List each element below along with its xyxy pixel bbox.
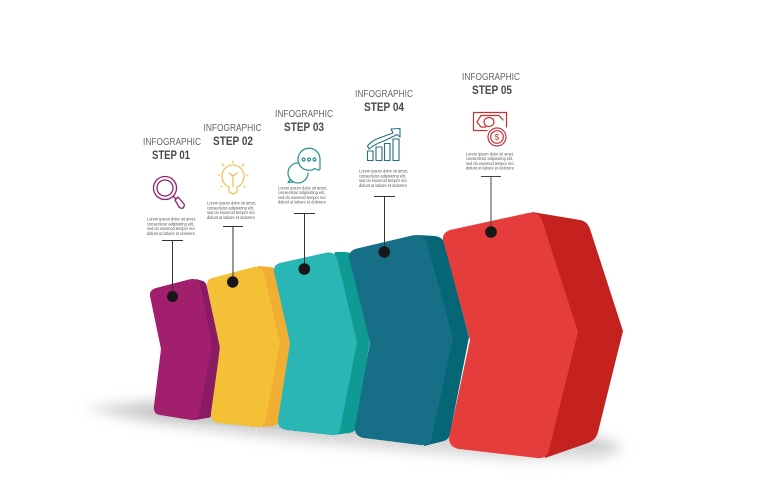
text block: step 1: didunt ut labore et dolorere bbox=[147, 231, 196, 236]
text block: step 1: Lorem ipsum dolor sit amet, bbox=[147, 216, 196, 222]
heading: step 4 bbox=[355, 89, 413, 114]
text block: step 2: sed do eiusmod tempor inci bbox=[207, 210, 255, 215]
text block: step 5: didunt ut labore et dolorere bbox=[466, 166, 515, 171]
connector: step 4 bbox=[374, 196, 395, 258]
text block: step 5: consectetur adipisicing elit, bbox=[466, 156, 513, 161]
text block: step 2: Lorem ipsum dolor sit amet, bbox=[207, 200, 256, 206]
text block: step 1: sed do eiusmod tempor inci bbox=[147, 226, 195, 231]
step 4 block bbox=[349, 235, 469, 446]
heading: step 2 bbox=[204, 123, 262, 148]
heading: step 2: STEP 02 bbox=[213, 136, 253, 148]
text block: step 3: sed do eiusmod tempor inci bbox=[278, 195, 326, 200]
heading: step 3: STEP 03 bbox=[284, 122, 324, 134]
icon: light bulb bbox=[218, 161, 248, 194]
text block: step 2 bbox=[207, 200, 256, 220]
icon: chat bubbles bbox=[288, 148, 320, 183]
text block: step 5: sed do eiusmod tempor inci bbox=[466, 161, 514, 166]
text block: step 1: consectetur adipisicing elit, bbox=[147, 221, 194, 226]
text block: step 2: consectetur adipisicing elit, bbox=[207, 205, 254, 210]
heading: step 3: INFOGRAPHIC bbox=[275, 109, 333, 120]
heading: step 3 bbox=[275, 109, 333, 134]
heading: step 2: INFOGRAPHIC bbox=[204, 123, 262, 134]
step 5 block bbox=[443, 212, 623, 458]
heading: step 4: STEP 04 bbox=[364, 102, 405, 114]
connector: step 1 bbox=[162, 240, 183, 302]
text block: step 4: sed do eiusmod tempor inci bbox=[359, 178, 407, 183]
heading: step 1: STEP 01 bbox=[152, 150, 190, 162]
heading: step 1: INFOGRAPHIC bbox=[143, 137, 201, 148]
text block: step 4: didunt ut labore et dolorere bbox=[359, 183, 408, 188]
text block: step 3: consectetur adipisicing elit, bbox=[278, 190, 325, 195]
text block: step 3: Lorem ipsum dolor sit amet, bbox=[278, 185, 327, 190]
connector: step 3 bbox=[294, 213, 315, 275]
text block: step 4 bbox=[359, 169, 408, 188]
connector: step 2 bbox=[223, 226, 243, 288]
step 3 block bbox=[274, 252, 370, 435]
text block: step 3 bbox=[278, 185, 327, 205]
text block: step 5: Lorem ipsum dolor sit amet, bbox=[466, 152, 514, 156]
step 2 block bbox=[207, 266, 291, 427]
text block: step 4: consectetur adipisicing elit, bbox=[359, 173, 406, 178]
text block: step 1 bbox=[147, 216, 196, 236]
heading: step 5 bbox=[462, 72, 520, 97]
heading: step 5: INFOGRAPHIC bbox=[462, 72, 520, 83]
text block: step 4: Lorem ipsum dolor sit amet, bbox=[359, 169, 408, 174]
connector: step 5 bbox=[481, 176, 501, 238]
icon: money bbox=[474, 112, 506, 146]
text block: step 5 bbox=[466, 152, 515, 171]
icon: magnifier bbox=[154, 176, 184, 208]
heading: step 1 bbox=[143, 137, 201, 162]
ground shadow bbox=[82, 401, 625, 468]
text block: step 3: didunt ut labore et dolorere bbox=[278, 200, 327, 205]
icon: money: $ bbox=[495, 133, 500, 142]
icon: growth chart bbox=[368, 128, 400, 160]
step 1 block bbox=[150, 279, 220, 420]
heading: step 5: STEP 05 bbox=[472, 85, 513, 97]
heading: step 4: INFOGRAPHIC bbox=[355, 89, 413, 100]
text block: step 2: didunt ut labore et dolorere bbox=[207, 215, 256, 220]
